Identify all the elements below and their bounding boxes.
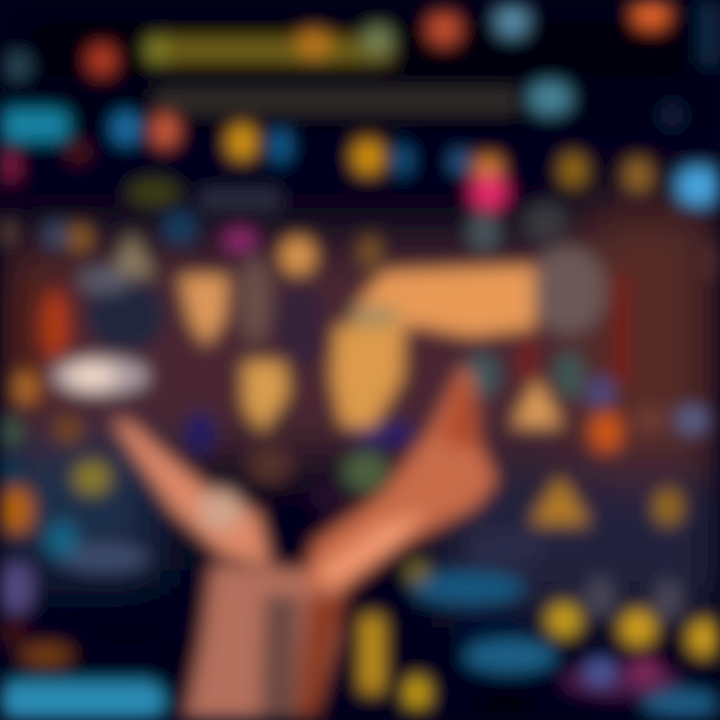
arm	[186, 565, 345, 720]
right hand fingers	[306, 366, 496, 590]
map: dark continent shadows and side tones	[78, 246, 629, 512]
left side icons	[0, 291, 214, 666]
hands	[114, 366, 496, 720]
middle row icons	[0, 110, 720, 209]
bar chart: yellow bottom bars	[361, 561, 429, 709]
top row icons	[6, 0, 720, 130]
lower row icons	[0, 179, 719, 282]
cloud highlight	[14, 358, 148, 404]
left hand finger	[114, 419, 270, 566]
subtitle bar	[154, 82, 571, 114]
right side icons	[530, 406, 719, 655]
title banner	[146, 26, 392, 63]
map: orange continents	[180, 266, 562, 432]
bottom blue panels	[0, 530, 720, 720]
world map	[78, 246, 629, 512]
